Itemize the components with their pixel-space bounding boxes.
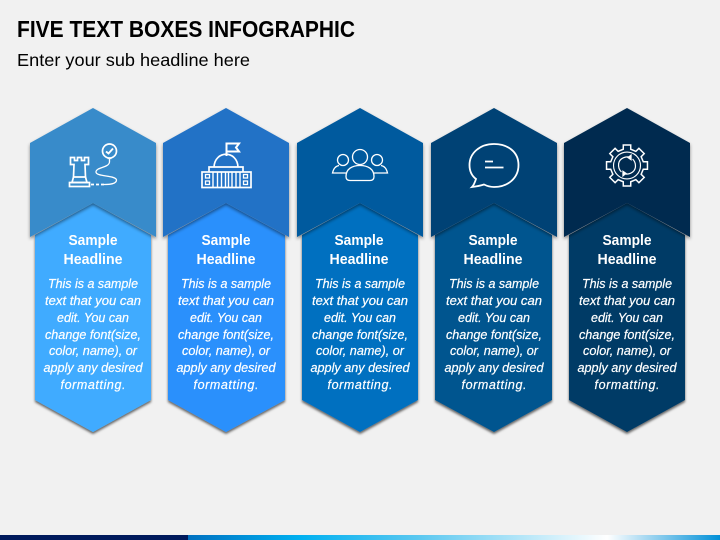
body text 1: edit. You can	[57, 311, 129, 325]
body text 2: color, name), or	[182, 344, 271, 358]
icon: speech bubble	[470, 144, 518, 187]
title: FIVE TEXT BOXES INFOGRAPHIC	[17, 16, 355, 42]
body text 2: edit. You can	[190, 311, 262, 325]
body text 2: text that you can	[178, 294, 274, 308]
upper hexagon 1	[30, 108, 156, 237]
upper hexagon 5	[564, 108, 690, 237]
lower box 5	[569, 203, 685, 432]
body text 1: text that you can	[45, 294, 141, 308]
subtitle: Enter your sub headline here	[17, 50, 250, 70]
body text 5: change font(size,	[579, 328, 675, 342]
body text 4: formatting.	[462, 378, 526, 392]
body text 4: color, name), or	[450, 344, 539, 358]
body text 2: formatting.	[194, 378, 258, 392]
body text 5: This is a sample	[582, 277, 672, 291]
icon: rook and path	[70, 144, 116, 186]
body text 2: change font(size,	[178, 328, 274, 342]
panel: box 1: Headline	[64, 252, 122, 268]
upper hexagon 2	[163, 108, 289, 237]
body text 1: apply any desired	[44, 361, 144, 375]
footer bar	[0, 535, 720, 540]
upper hexagon 3	[297, 108, 423, 237]
headline 1: Sample	[68, 233, 118, 249]
body text 4	[444, 277, 545, 392]
body text 2: This is a sample	[181, 277, 271, 291]
icon: capitol building	[202, 144, 251, 188]
lower box 4	[435, 203, 552, 432]
body text 2	[176, 277, 277, 392]
panel: box 2: Headline	[196, 252, 256, 268]
icon: group of people	[332, 150, 388, 180]
panel: box 1	[30, 108, 156, 432]
body text 3: color, name), or	[316, 344, 405, 358]
body text 3: text that you can	[312, 294, 408, 308]
body text 4: edit. You can	[458, 311, 530, 325]
body text 1: change font(size,	[45, 328, 141, 342]
headline 3: Sample	[334, 233, 384, 249]
body text 5: text that you can	[579, 294, 675, 308]
body text 5: apply any desired	[578, 361, 678, 375]
body text 3: edit. You can	[324, 311, 396, 325]
body text 3: change font(size,	[312, 328, 408, 342]
body text 1: color, name), or	[49, 344, 138, 358]
body text 5	[578, 277, 678, 392]
body text 5: edit. You can	[591, 311, 663, 325]
lower box 1	[35, 203, 151, 432]
body text 4: change font(size,	[446, 328, 542, 342]
headline 5: Sample	[602, 233, 652, 249]
icon: gear with arrows	[607, 145, 647, 186]
panel: box 2	[163, 108, 289, 432]
body text 4: text that you can	[446, 294, 542, 308]
panel: box 4: Headline	[464, 252, 522, 268]
body text 4: This is a sample	[449, 277, 539, 291]
body text 1: This is a sample	[48, 277, 138, 291]
body text 5: formatting.	[594, 378, 660, 392]
body text 3: formatting.	[328, 378, 392, 392]
panel: box 3: Headline	[330, 252, 388, 268]
body text 3	[310, 277, 411, 392]
headline 4: Sample	[468, 233, 518, 249]
body text 4: apply any desired	[444, 361, 545, 375]
lower box 2	[168, 203, 285, 432]
panel: box 4	[431, 108, 557, 432]
panel: box 3	[297, 108, 423, 432]
lower box 3	[302, 203, 418, 432]
panel: box 5	[564, 108, 690, 432]
body text 3: apply any desired	[310, 361, 411, 375]
body text 1: formatting.	[60, 378, 126, 392]
headline 2: Sample	[202, 233, 250, 249]
body text 1	[44, 277, 144, 392]
body text 5: color, name), or	[583, 344, 672, 358]
panel: box 5: Headline	[598, 252, 656, 268]
body text 2: apply any desired	[176, 361, 277, 375]
upper hexagon 4	[431, 108, 557, 237]
body text 3: This is a sample	[315, 277, 405, 291]
